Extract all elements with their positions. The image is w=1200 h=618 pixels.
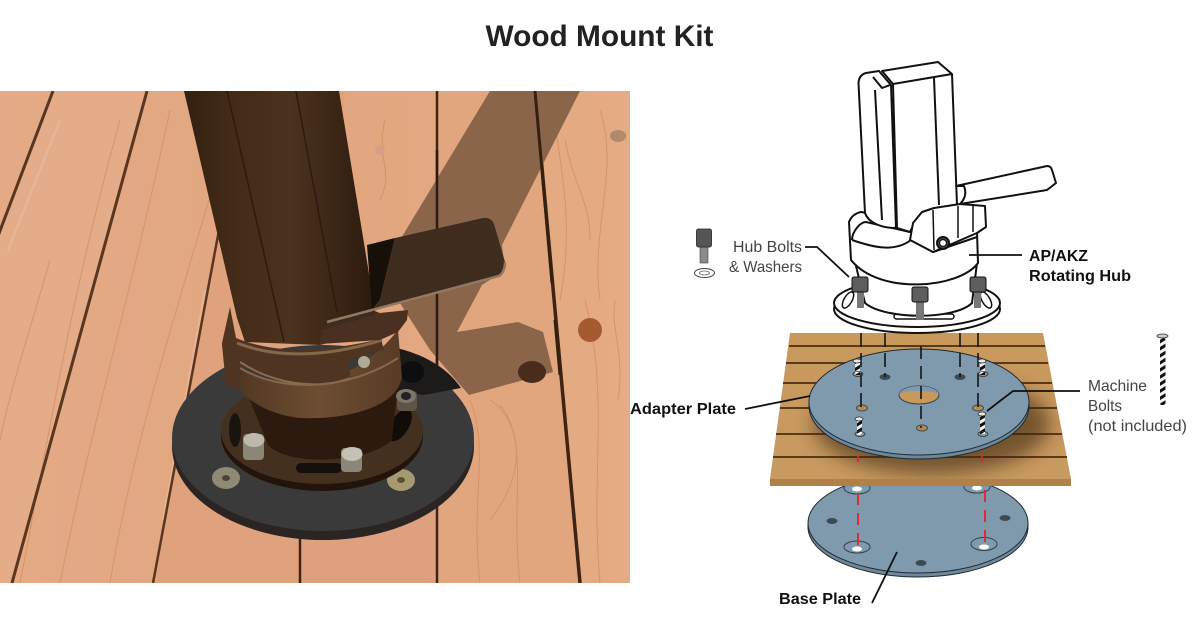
label: base plate	[779, 552, 897, 608]
hub flange	[834, 279, 1000, 333]
photo: mounted umbrella hub on wood deck	[0, 91, 630, 583]
label: base plate: Base Plate	[779, 591, 861, 608]
label: machine bolts: Bolts	[1088, 398, 1122, 415]
label: AP/AKZ rotating hub: AP/AKZ	[1029, 248, 1088, 265]
knots	[375, 130, 626, 383]
wood panel	[770, 333, 1071, 486]
center hole	[899, 386, 939, 404]
pole	[184, 91, 378, 345]
hub bolts on flange	[852, 277, 986, 320]
hub collar, upper clamp	[222, 307, 398, 390]
label: hub bolts and washers: Hub Bolts	[733, 239, 802, 256]
label: hub bolts and washers	[729, 239, 849, 277]
label: machine bolts	[987, 378, 1187, 435]
hub body	[849, 212, 978, 316]
label: adapter plate: Adapter Plate	[630, 401, 736, 418]
lever handle	[320, 218, 505, 344]
deck boards	[0, 91, 630, 583]
base plate	[172, 345, 474, 540]
hub neck	[248, 385, 398, 460]
hub handle and clamp	[910, 166, 1056, 252]
title: Wood Mount Kit	[486, 20, 714, 53]
label: machine bolts: (not included)	[1088, 418, 1187, 435]
flange bolts	[243, 389, 417, 472]
label: adapter plate	[630, 396, 810, 418]
machine bolts in plate	[855, 362, 985, 435]
label: AP/AKZ rotating hub: Rotating Hub	[1029, 268, 1131, 285]
hub collar, lower band	[235, 330, 402, 418]
hub flange	[221, 396, 423, 491]
icon: machine bolt	[1157, 334, 1168, 405]
label: machine bolts: Machine	[1088, 378, 1147, 395]
label: AP/AKZ rotating hub	[969, 248, 1131, 285]
diagram: exploded wood mount assembly	[694, 62, 1168, 577]
plate holes	[856, 374, 984, 431]
gaps between boards	[0, 91, 580, 583]
adapter plate	[809, 349, 1029, 459]
icon: hub bolt and washer	[694, 229, 714, 278]
base plate	[808, 473, 1028, 577]
machine bolt heads	[853, 359, 988, 436]
base plate screws	[212, 467, 415, 491]
red dashed guide lines	[858, 490, 985, 549]
hub post	[858, 62, 957, 232]
label: hub bolts and washers: & Washers	[729, 259, 802, 276]
cast shadow	[398, 91, 580, 395]
black dashed guide lines	[861, 333, 978, 428]
base plate holes	[826, 481, 1010, 566]
